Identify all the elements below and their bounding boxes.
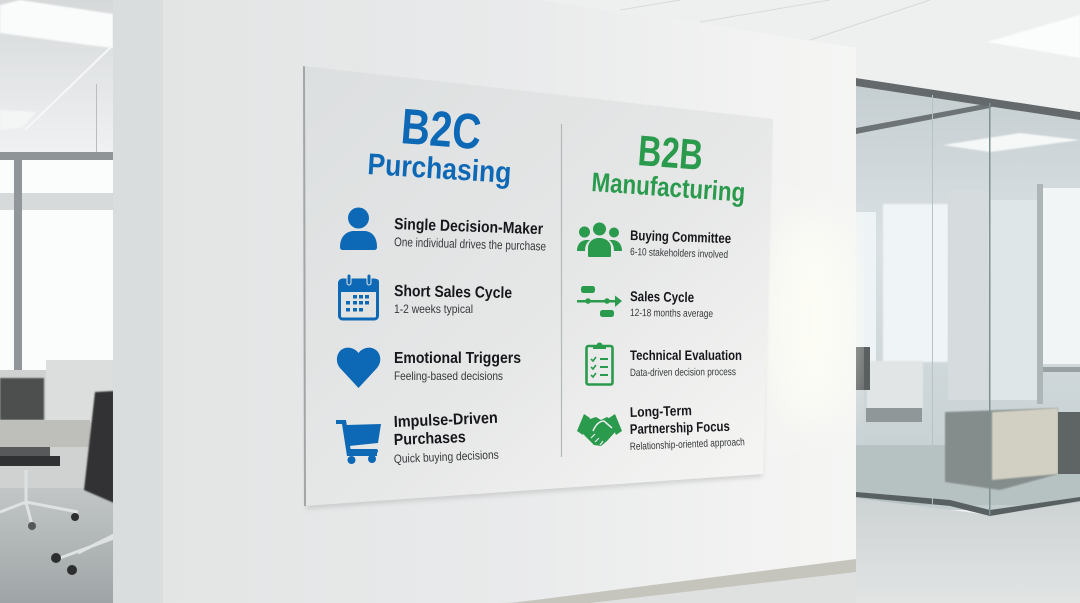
board shadow [306, 70, 770, 509]
item: long-term partnership focus: Relationship-oriented approach [630, 436, 745, 453]
item: impulse-driven purchases: Purchases [393, 429, 466, 449]
item: sales cycle: 12-18 months average [630, 307, 713, 320]
heading: Manufacturing: Manufacturing [591, 167, 746, 208]
icon: handshake [577, 414, 622, 446]
item: technical evaluation: Data-driven decision process [630, 366, 736, 379]
icon: sales cycle timeline [577, 286, 622, 317]
pillar [113, 0, 163, 603]
ceiling light [0, 0, 113, 48]
column divider [560, 124, 562, 457]
item: emotional triggers [394, 350, 521, 383]
item: single decision-maker [394, 216, 546, 254]
column: B2B manufacturing [577, 127, 746, 453]
heading: B2C: B2C [399, 98, 483, 160]
item: impulse-driven purchases: Quick buying decisions [394, 448, 499, 466]
right office background [856, 0, 1080, 603]
floor and baseboard [500, 559, 856, 603]
wall [163, 0, 856, 603]
icon: person [340, 208, 377, 250]
icon: heart [337, 348, 380, 388]
item: technical evaluation: Technical Evaluation [630, 347, 742, 363]
icon: shopping cart [336, 420, 381, 464]
heading: Purchasing: Purchasing [367, 148, 512, 190]
item: impulse-driven purchases [393, 410, 499, 466]
column: B2C purchasing [336, 98, 546, 466]
floor [856, 498, 1080, 603]
item: single decision-maker: Single Decision-Maker [394, 216, 543, 238]
item: technical evaluation [630, 347, 742, 379]
ceiling [545, 0, 1080, 112]
item: buying committee: Buying Committee [630, 227, 732, 246]
panel: wall board [303, 66, 773, 506]
item: buying committee [630, 227, 732, 261]
item: long-term partnership focus [630, 402, 745, 453]
reflective floor behind glass [856, 445, 1080, 505]
furniture [945, 408, 1058, 490]
left office background [0, 0, 114, 603]
icon: clipboard checklist [586, 342, 612, 384]
icon: buying committee [577, 222, 622, 257]
item: single decision-maker: One individual drives the purchase [394, 235, 546, 254]
item: short sales cycle: 1-2 weeks typical [394, 302, 473, 316]
item: sales cycle [630, 288, 713, 320]
distant windows [856, 212, 876, 362]
office chair [84, 391, 114, 503]
item: impulse-driven purchases: Impulse-Driven [393, 410, 498, 431]
item: short sales cycle [394, 283, 512, 316]
item: long-term partnership focus: Long-Term [630, 402, 692, 420]
wall light glow [765, 210, 855, 430]
icon: calendar [339, 274, 379, 319]
item: buying committee: 6-10 stakeholders involved [630, 246, 728, 261]
item: long-term partnership focus: Partnership Focus [630, 418, 730, 437]
item: emotional triggers: Emotional Triggers [394, 350, 521, 367]
item: emotional triggers: Feeling-based decisions [394, 369, 503, 383]
item: short sales cycle: Short Sales Cycle [394, 283, 512, 302]
desk and screen [0, 370, 114, 495]
heading: B2B: B2B [636, 127, 705, 180]
item: sales cycle: Sales Cycle [630, 288, 694, 305]
